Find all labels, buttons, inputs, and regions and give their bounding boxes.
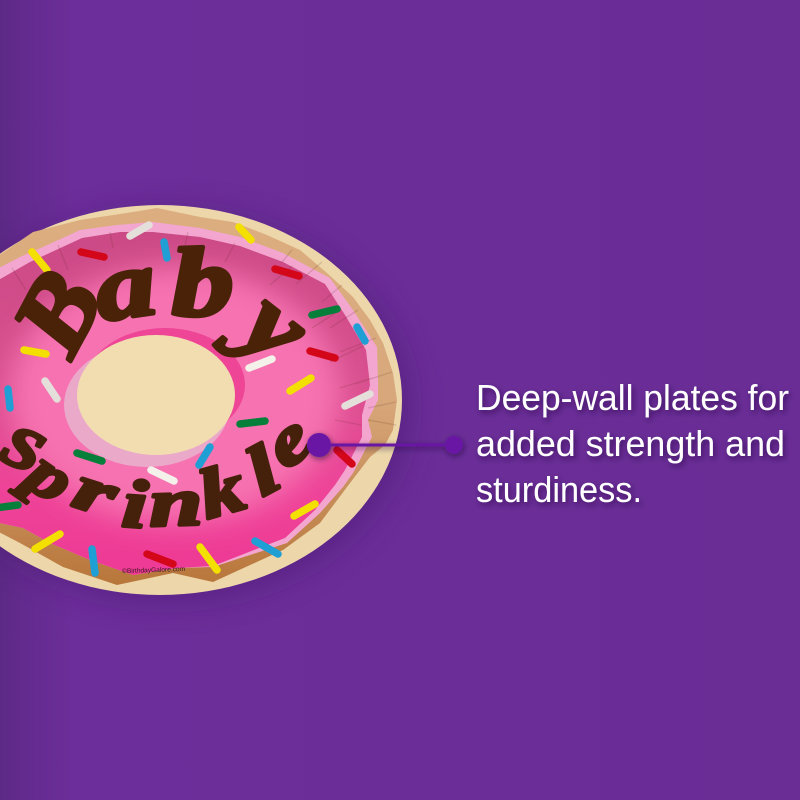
wall crease lines <box>12 232 396 425</box>
plate title: sprinkle: n <box>148 463 203 541</box>
end dot <box>445 436 463 454</box>
icing floor highlight <box>10 267 340 523</box>
plate title: sprinkle: e <box>249 400 327 483</box>
cream centre <box>77 335 235 455</box>
plate title: Baby <box>0 228 331 386</box>
plate title: Baby: y <box>213 259 331 386</box>
callout connector <box>307 433 463 457</box>
callout text <box>476 377 789 510</box>
pink icing wall <box>0 232 370 575</box>
callout text: added strength and <box>476 423 785 464</box>
callout text: Deep-wall plates for <box>476 377 789 418</box>
callout text: sturdiness. <box>476 469 642 510</box>
plate title: sprinkle: k <box>190 447 253 534</box>
plate title: Baby: b <box>169 228 235 338</box>
plate title: sprinkle: l <box>233 430 292 511</box>
cream centre shadow ring <box>85 328 245 442</box>
donut paper plate <box>0 205 402 595</box>
sprinkles <box>0 225 370 573</box>
plate anchor dot <box>307 433 331 457</box>
plate title: sprinkle: p <box>8 431 88 518</box>
copyright line: ©BirthdayGalore.com <box>122 565 186 575</box>
plate title: sprinkle: i <box>120 467 150 543</box>
plate title: sprinkle <box>0 400 327 543</box>
plate shadow <box>0 210 411 602</box>
pale icing edge <box>0 222 378 575</box>
brown crust ring <box>0 208 397 585</box>
connector line <box>319 444 454 446</box>
plate title: sprinkle: r <box>66 452 126 531</box>
centre pale ring <box>64 343 230 467</box>
plate title: Baby: a <box>88 230 162 342</box>
plate rim <box>0 205 402 595</box>
